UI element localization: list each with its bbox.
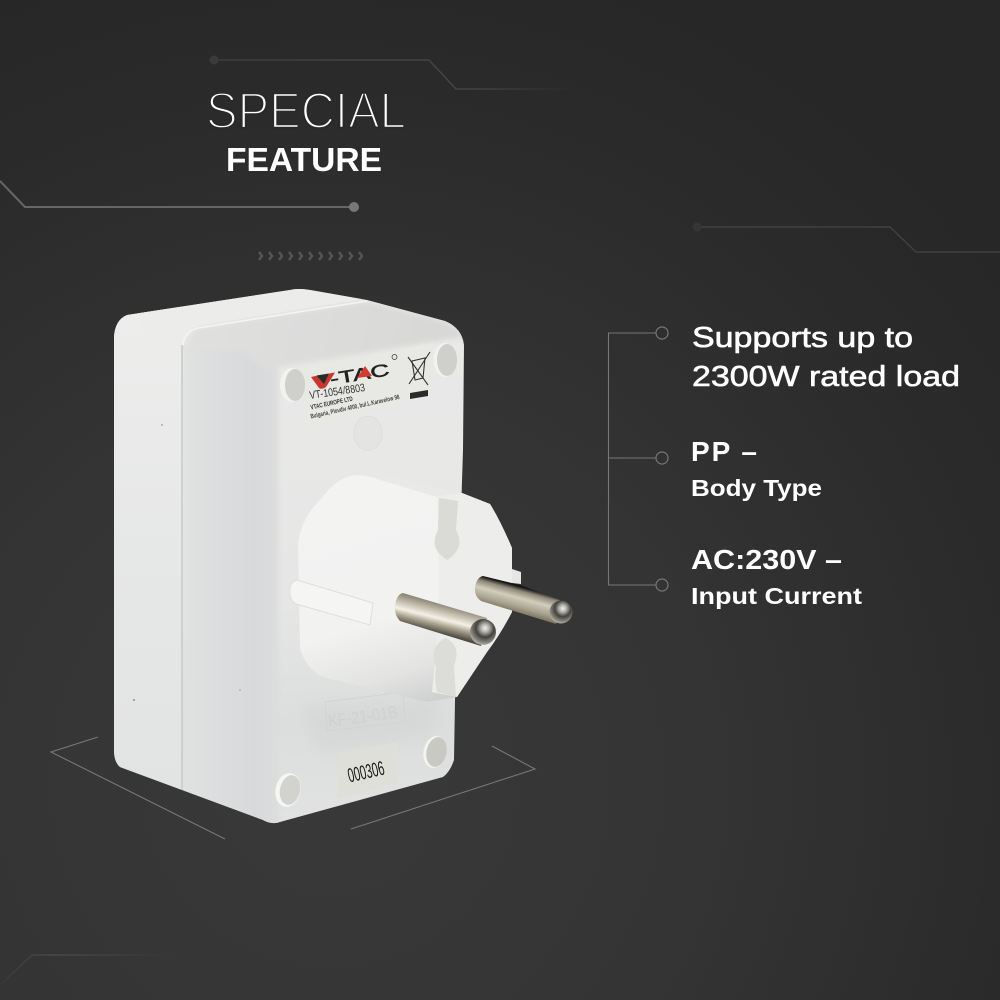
label — [303, 343, 435, 427]
serial sticker — [337, 742, 397, 799]
plug side and face — [298, 475, 512, 702]
adapter body — [114, 289, 464, 824]
plug rib: side — [290, 580, 373, 625]
floor bracket: left — [51, 737, 225, 839]
title: SPECIAL: SPECIAL — [206, 82, 406, 139]
decorative circuit line: right — [692, 222, 1000, 252]
model text: VT-1054/8803 — [309, 382, 366, 402]
address text: VTAC EUROPE LTD — [310, 396, 354, 411]
callout text: input current: AC:230V – — [691, 544, 842, 575]
callout text: body type: PP – — [691, 436, 757, 467]
embossed mark: KF-21-01B — [327, 702, 399, 731]
icon: crossed bin — [408, 352, 430, 385]
callout text: input current: Input Current — [691, 583, 862, 609]
callout text: rated load — [692, 322, 960, 393]
callout marker one — [656, 327, 668, 339]
callout text: body type — [691, 436, 822, 501]
plug rib: top — [377, 473, 463, 510]
icon: black bar — [410, 390, 428, 399]
callout text: body type: Body Type — [691, 475, 822, 501]
title: FEATURE: FEATURE — [226, 142, 382, 179]
notch: lower — [433, 638, 457, 697]
logo: V-TAC: -TAC — [329, 360, 391, 389]
plug — [290, 473, 521, 702]
product: plug adapter — [100, 280, 572, 840]
plug rib: right stub — [512, 569, 521, 584]
serial sticker: 000306 — [346, 758, 387, 787]
mounting holes — [272, 343, 457, 809]
address text line two: Bulgaria, Plovdiv 4000, bul.L.Karavelow 98 — [310, 394, 401, 420]
pin: rear — [475, 576, 572, 624]
floor bracket: right — [351, 746, 535, 829]
callout marker two — [656, 452, 668, 464]
callout text: rated load: 2300W rated load — [692, 361, 960, 393]
notch: upper — [435, 498, 459, 560]
decorative circuit line: bottom left — [0, 955, 176, 985]
connector bracket — [608, 327, 668, 591]
callout text: rated load: Supports up to — [692, 322, 913, 354]
callout text: input current — [691, 544, 862, 609]
chevron row — [259, 252, 362, 260]
callout marker three — [656, 579, 668, 591]
decorative circuit line: top — [210, 56, 575, 89]
pin: front — [395, 593, 496, 646]
plug face — [432, 493, 512, 697]
decorative circuit line: under title — [0, 181, 359, 212]
title — [206, 82, 406, 179]
embossed circle mark — [354, 416, 382, 450]
